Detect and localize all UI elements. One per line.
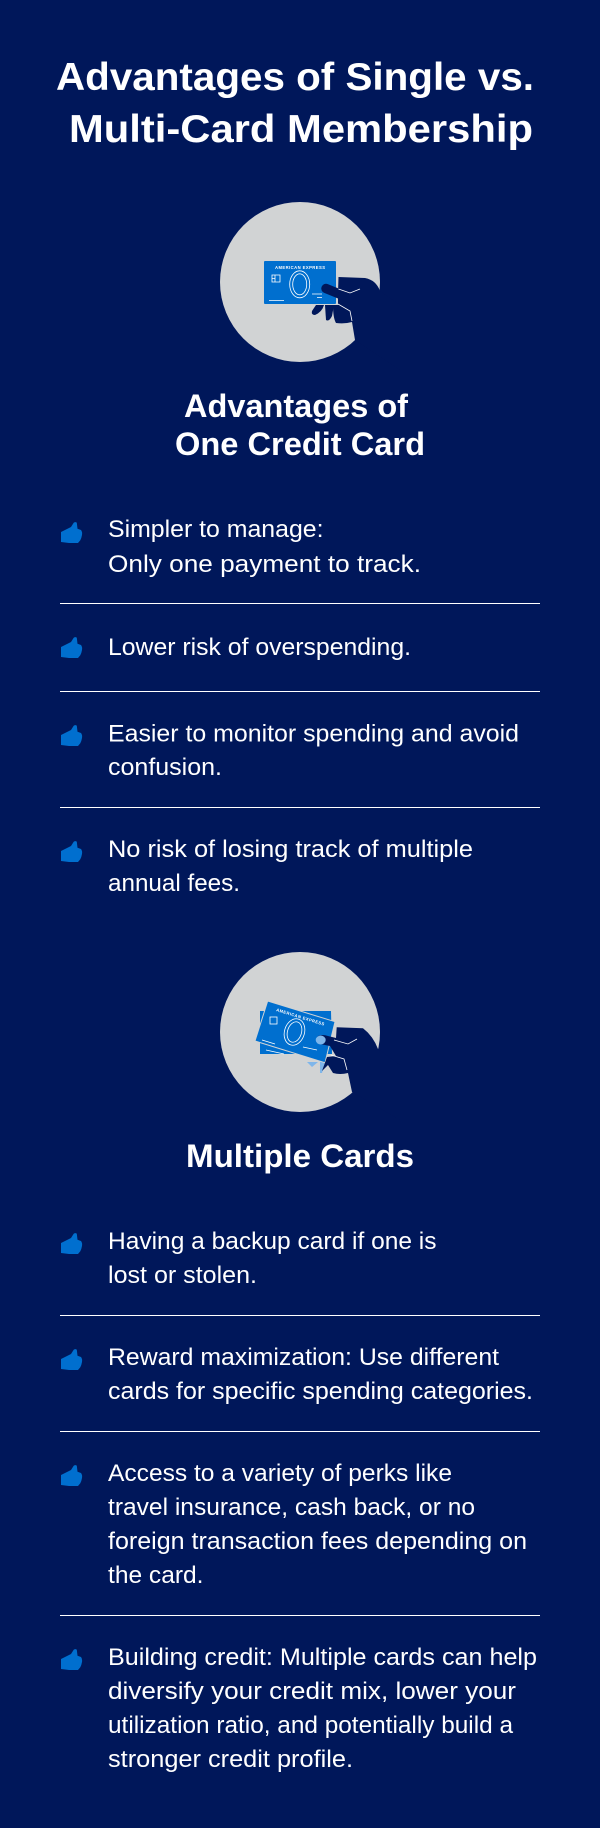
list: one card advantages — [60, 516, 540, 897]
icon: hand holding multiple cards — [220, 952, 400, 1120]
item: variety of perks: the card. — [108, 1562, 204, 1589]
item: annual fees — [61, 836, 473, 897]
title: Advantages of Single vs. — [56, 56, 534, 99]
item: variety of perks: travel insurance, cash back, or no — [108, 1494, 475, 1521]
icon: hand holding multiple cards: AMERICAN EXPRESS — [276, 1007, 325, 1027]
item: building credit: diversify your credit mix, lower your — [108, 1678, 516, 1705]
item: backup card — [61, 1228, 436, 1289]
item: easier to monitor — [61, 720, 519, 781]
item: variety of perks: foreign transaction fees depending on — [108, 1528, 527, 1555]
item: lower risk: Lower risk of overspending. — [108, 634, 411, 661]
item: reward maximization: cards for specific spending categories. — [108, 1378, 533, 1405]
item: backup card: Having a backup card if one is — [108, 1228, 436, 1255]
item: easier to monitor: confusion. — [108, 754, 222, 781]
heading: advantages of one credit card: One Credit Card — [175, 426, 425, 462]
item: building credit — [61, 1644, 537, 1773]
list: multiple cards advantages — [60, 1228, 540, 1773]
icon: hand holding one card: AMERICAN EXPRESS — [275, 265, 325, 270]
item: variety of perks — [61, 1460, 527, 1589]
item: easier to monitor: Easier to monitor spending and avoid — [108, 720, 519, 748]
heading: multiple cards: Multiple Cards — [186, 1138, 414, 1174]
item: reward maximization — [61, 1344, 533, 1405]
item: building credit: Building credit: Multiple cards can help — [108, 1644, 537, 1671]
item: backup card: lost or stolen. — [108, 1262, 257, 1289]
title: Multi-Card Membership — [69, 108, 533, 151]
item: building credit: stronger credit profile. — [108, 1746, 353, 1773]
item: reward maximization: Reward maximization: Use different — [108, 1344, 499, 1371]
heading: advantages of one credit card: Advantages of — [184, 388, 408, 424]
icon: hand holding one card — [220, 202, 400, 370]
item: variety of perks: Access to a variety of perks like — [108, 1460, 452, 1487]
item: building credit: utilization ratio, and potentially build a — [108, 1712, 514, 1739]
item: annual fees: annual fees. — [108, 870, 240, 897]
item: simpler to manage: Simpler to manage: — [108, 516, 324, 543]
heading: advantages of one credit card — [175, 388, 425, 462]
item: simpler to manage: Only one payment to track. — [108, 551, 421, 578]
title — [56, 56, 534, 151]
item: simpler to manage — [61, 516, 421, 578]
item: annual fees: No risk of losing track of multiple — [108, 836, 473, 863]
